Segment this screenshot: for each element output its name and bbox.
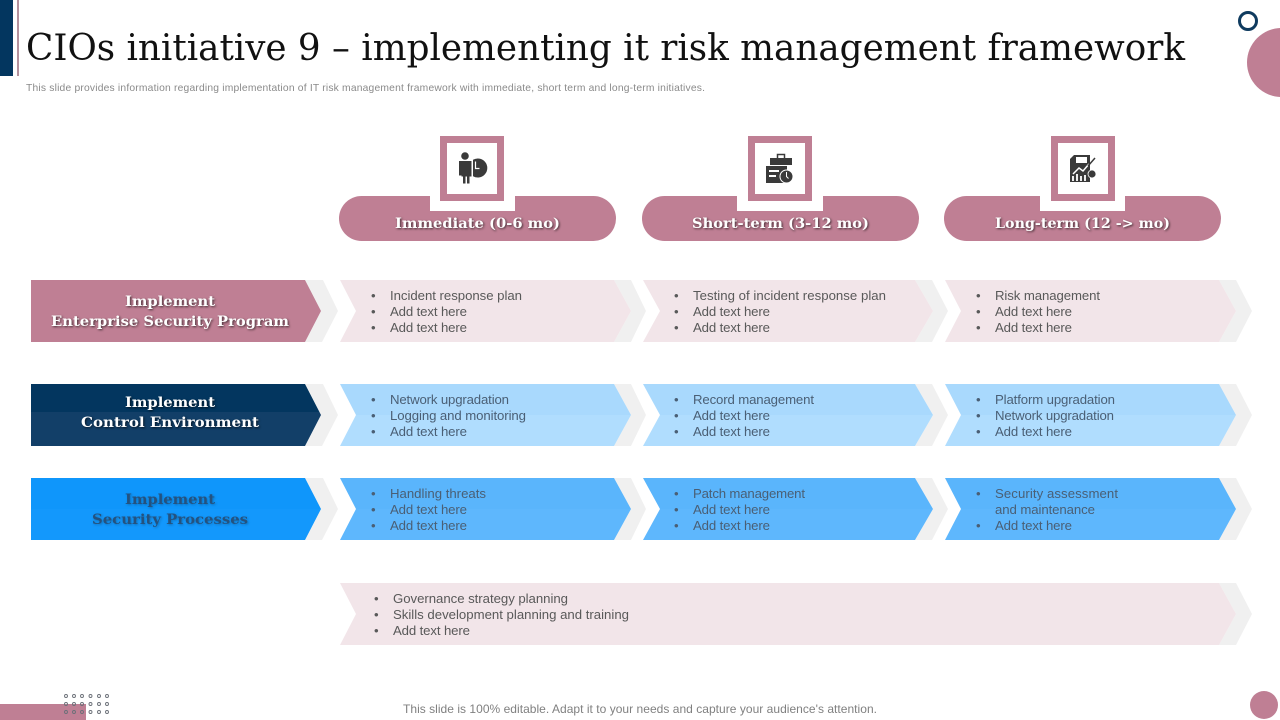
cell: short-term: Add text here [693, 424, 770, 439]
row label: security processes: Security Processes [92, 512, 248, 528]
cell: immediate: Add text here [390, 518, 467, 533]
cell: immediate: Add text here [390, 424, 467, 439]
decorative circle bottom right [1250, 691, 1278, 719]
cell: long-term: Add text here [995, 304, 1072, 319]
cell: short-term: • [674, 518, 679, 533]
cell: long-term: • [976, 392, 981, 407]
cell: long-term [945, 478, 1252, 540]
row label: enterprise security program: Implement [125, 294, 216, 310]
row: enterprise security program [31, 280, 1252, 342]
cell: immediate: • [371, 502, 376, 517]
cell: short-term [643, 384, 948, 446]
subtitle: This slide provides information regarding implementation of IT risk management framework with immediate, short term and long-term initiatives. [26, 83, 705, 94]
cell: immediate: • [371, 392, 376, 407]
cell: long-term: Add text here [995, 320, 1072, 335]
cell: immediate: • [371, 304, 376, 319]
row label: security processes: Implement [125, 492, 216, 508]
column header: immediate: Immediate (0-6 mo) [395, 216, 560, 232]
cell: long-term: Risk management [995, 288, 1100, 303]
cell: short-term: Record management [693, 392, 814, 407]
header accent bars [0, 0, 19, 76]
cell: short-term: Add text here [693, 502, 770, 517]
full-width governance row: Skills development planning and training [393, 607, 629, 622]
cell: short-term [643, 280, 948, 342]
cell: short-term: • [674, 320, 679, 335]
cell: short-term: Patch management [693, 486, 805, 501]
cell: short-term: • [674, 486, 679, 501]
full-width governance row: • [374, 591, 379, 606]
cell: immediate: • [371, 288, 376, 303]
row: security processes [31, 478, 1252, 540]
full-width governance row [340, 583, 1252, 645]
icon: person with clock [444, 140, 500, 198]
full-width governance row: Governance strategy planning [393, 591, 568, 606]
cell: immediate: Add text here [390, 304, 467, 319]
icon: report with chart [1054, 140, 1112, 198]
cell: long-term: and maintenance [995, 502, 1095, 517]
cell: long-term [945, 280, 1252, 342]
cell: short-term [643, 478, 948, 540]
row label: enterprise security program: Enterprise Security Program [51, 314, 289, 330]
cell: immediate: • [371, 518, 376, 533]
cell: immediate: • [371, 408, 376, 423]
cell: long-term: • [976, 320, 981, 335]
cell: long-term: • [976, 304, 981, 319]
cell: long-term: Add text here [995, 518, 1072, 533]
column header: immediate [339, 140, 616, 241]
full-width governance row: Add text here [393, 623, 470, 638]
row label: control environment: Implement [125, 395, 216, 411]
cell: long-term: • [976, 288, 981, 303]
cell: short-term: • [674, 424, 679, 439]
cell: long-term [945, 384, 1252, 446]
cell: immediate [340, 478, 646, 540]
cell: long-term: Platform upgradation [995, 392, 1115, 407]
row label: control environment [31, 384, 338, 446]
decorative ring top right [1240, 12, 1256, 30]
cell: short-term: Add text here [693, 320, 770, 335]
cell: immediate: Incident response plan [390, 288, 522, 303]
cell: short-term: • [674, 408, 679, 423]
cell: immediate: Handling threats [390, 486, 486, 501]
cell: long-term: • [976, 408, 981, 423]
cell: long-term: Add text here [995, 424, 1072, 439]
column header: long-term [944, 140, 1221, 241]
column header: short-term: Short-term (3-12 mo) [692, 216, 869, 232]
cell: short-term: • [674, 502, 679, 517]
cell: long-term: • [976, 486, 981, 501]
column header: long-term: Long-term (12 -> mo) [995, 216, 1170, 232]
row label: enterprise security program [31, 280, 338, 342]
cell: long-term: • [976, 518, 981, 533]
cell: immediate: Add text here [390, 320, 467, 335]
cell: immediate [340, 384, 646, 446]
cell: short-term: • [674, 288, 679, 303]
cell: immediate [340, 280, 646, 342]
icon: briefcase with clock [752, 140, 808, 198]
full-width governance row: • [374, 607, 379, 622]
footer note: This slide is 100% editable. Adapt it to your needs and capture your audience's attention. [403, 702, 877, 716]
cell: short-term: Add text here [693, 304, 770, 319]
row label: control environment: Control Environment [81, 415, 260, 431]
row label: security processes [31, 478, 338, 540]
column header: short-term [642, 140, 919, 241]
cell: immediate: • [371, 424, 376, 439]
full-width governance row: • [374, 623, 379, 638]
cell: immediate: Logging and monitoring [390, 408, 526, 423]
footer dot grid [64, 694, 108, 714]
title: CIOs initiative 9 – implementing it risk management framework [26, 28, 1186, 69]
cell: long-term: Network upgradation [995, 408, 1114, 423]
cell: short-term: Add text here [693, 518, 770, 533]
cell: long-term: Security assessment [995, 486, 1118, 501]
cell: short-term: Testing of incident response plan [693, 288, 886, 303]
cell: immediate: Add text here [390, 502, 467, 517]
footer pink bar [0, 704, 86, 720]
cell: immediate: • [371, 320, 376, 335]
cell: immediate: • [371, 486, 376, 501]
cell: long-term: • [976, 424, 981, 439]
cell: short-term: Add text here [693, 408, 770, 423]
cell: short-term: • [674, 304, 679, 319]
cell: immediate: Network upgradation [390, 392, 509, 407]
decorative circle top right [1247, 28, 1280, 97]
cell: short-term: • [674, 392, 679, 407]
row: control environment [31, 384, 1252, 446]
